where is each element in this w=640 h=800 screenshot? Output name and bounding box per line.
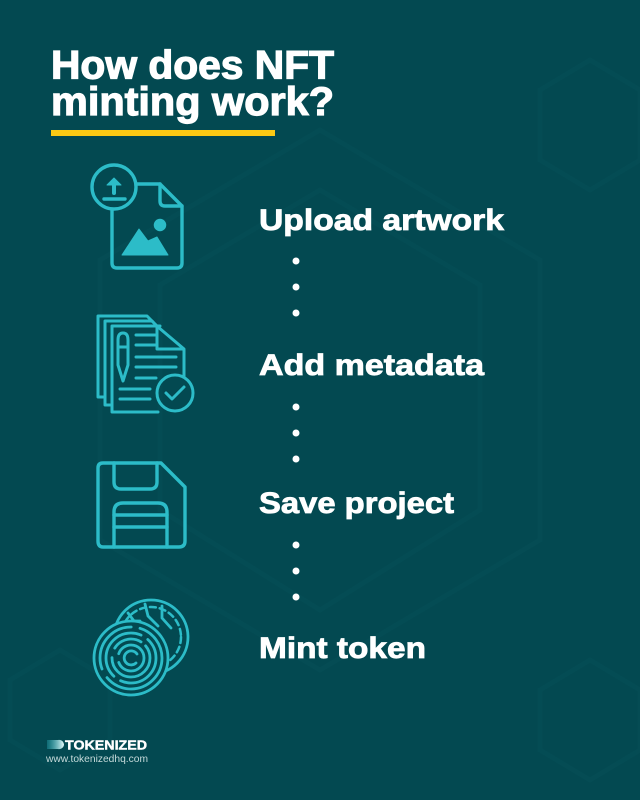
title underline — [51, 130, 275, 136]
title: How does NFT — [51, 44, 334, 88]
icon: mint token coins — [94, 600, 188, 695]
title — [51, 44, 334, 124]
logo: TOKENIZED — [65, 738, 147, 752]
icon: add metadata — [98, 316, 193, 412]
step label: add metadata: Add metadata — [259, 349, 484, 382]
dots connector 1 — [292, 258, 300, 316]
step label: upload artwork: Upload artwork — [259, 204, 504, 237]
icon: save project — [98, 463, 185, 547]
icon: upload artwork — [92, 165, 182, 268]
title: minting work? — [51, 80, 334, 124]
step label: mint token: Mint token — [259, 632, 426, 665]
step label: save project: Save project — [259, 487, 454, 520]
website url: www.tokenizedhq.com — [45, 753, 148, 765]
dots connector 3 — [292, 542, 300, 600]
dots connector 2 — [292, 404, 300, 462]
